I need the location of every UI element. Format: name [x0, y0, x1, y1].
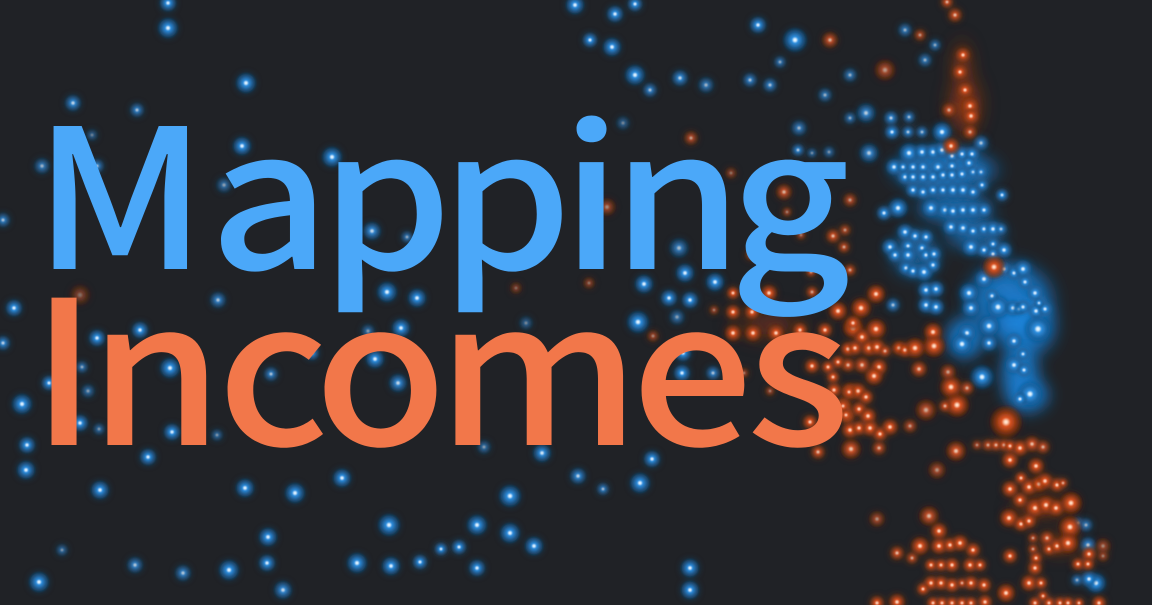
title: Incomes: Incomes: [31, 213, 850, 503]
blue glow clusters: [883, 144, 1063, 417]
orange income dots: right cluster: [834, 97, 1112, 605]
orange glow clusters: [720, 31, 1090, 561]
blue income dots: right cluster: [855, 102, 1107, 594]
orange income dots: upper and middle: [68, 0, 973, 460]
title: Mapping: Mapping: [33, 45, 851, 326]
